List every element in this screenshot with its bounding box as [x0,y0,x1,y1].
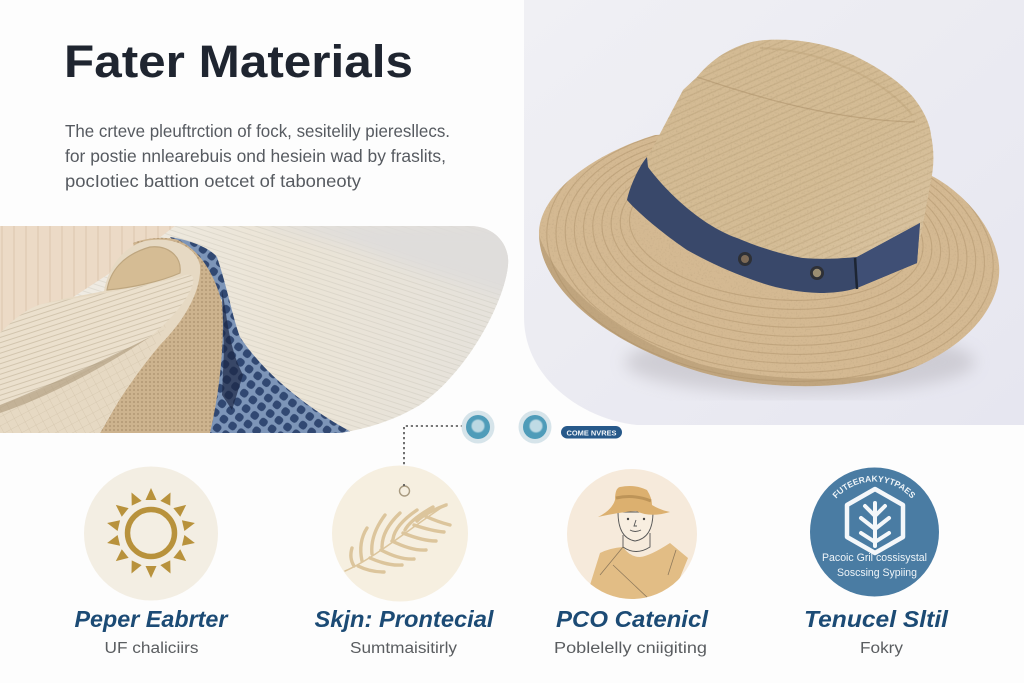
icon: palm leaf [332,466,468,602]
icon: certification badge: Soscsing Sypiing [837,567,917,579]
feature: PCO material [554,469,709,657]
caption: Fokry [860,640,903,657]
icon: certification badge: FUTEERAKYYTPAES [832,476,915,498]
caption: Sumtmaisitirly [350,640,457,657]
heading: Peper Eabrter [74,606,229,632]
icon: blue dot two [518,410,552,444]
heading: Skjn: Prontecial [314,606,494,632]
white fabric [74,226,508,433]
hat band [627,157,920,293]
peach ribbed fabric [0,226,174,332]
hat shadow [625,330,975,394]
rivets [738,252,824,280]
hat crown [648,40,934,258]
caption: Poblelelly cniigiting [554,640,707,657]
intro paragraph [65,121,450,191]
cream folded fabric [0,240,200,433]
feature: skin protection [314,466,494,657]
face [618,512,653,541]
title: Fater Materials [64,36,413,87]
sun hat [598,486,670,517]
caption: UF chaliciirs [104,640,199,657]
icon: person wearing hat [567,469,697,610]
icon: sun [84,466,218,600]
photo panel: folded fabric swatches [0,222,520,433]
blue fabric [170,237,353,433]
feature: Tencel [804,468,949,657]
icon: blue dot one [462,410,494,444]
intro paragraph: pocIotiec battion oetcet of taboneoty [65,171,361,191]
intro paragraph: The crteve pleuftrction of fock, sesitelily pieresllecs. [65,121,450,141]
heading: Tenucel Sltil [804,606,949,632]
shirt [590,543,688,599]
tag: pill label: COME NVRES [566,428,616,438]
tan knit fabric [100,238,223,433]
hat brim [539,134,1000,386]
fold shadow [0,337,150,413]
intro paragraph: for postie nnlearebuis ond hesiein wad by fraslits, [65,146,446,166]
icon: certification badge [810,468,939,596]
feature: paper fabric [74,466,229,657]
heading: PCO Catenicl [556,606,709,632]
connector: dotted leader line [404,426,463,484]
photo panel: straw hat [524,0,1024,425]
tag: pill label [561,426,622,438]
inner roll [107,247,180,290]
icon: certification badge: Pacoic Gril cossisystal [822,552,927,564]
